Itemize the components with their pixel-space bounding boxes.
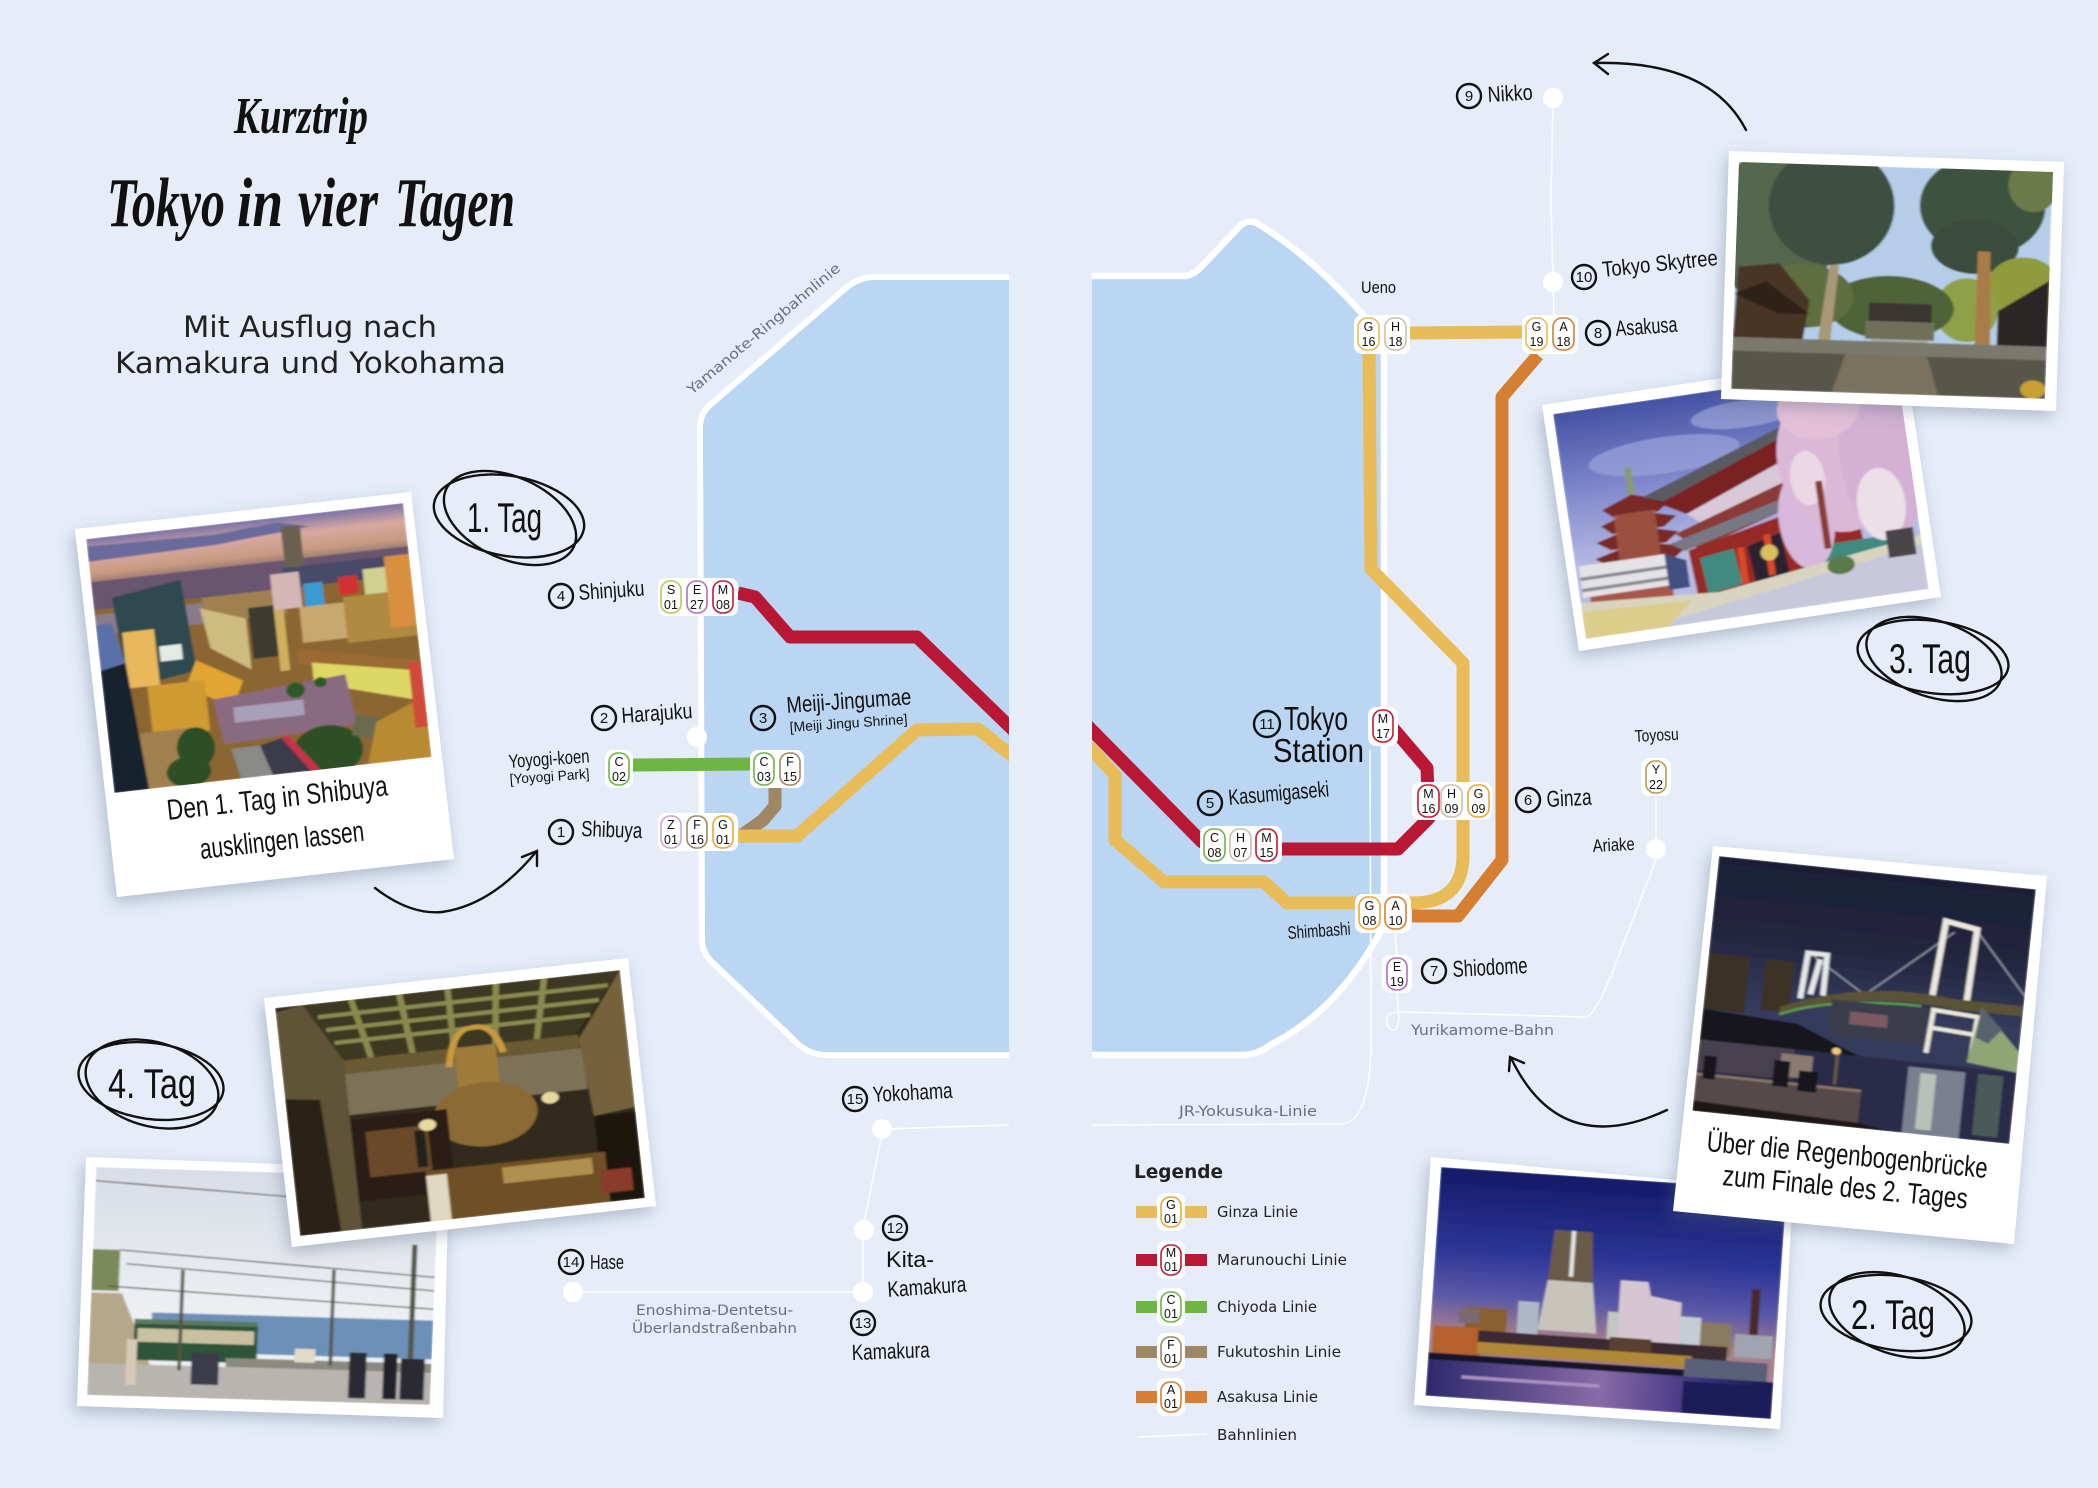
badge: Shimbashi: 10 <box>1389 914 1402 928</box>
badge: Ueno: 18 <box>1389 335 1402 349</box>
station label: Yoyogi-koen: [Yoyogi Park] <box>509 765 590 787</box>
station label: Ginza: Ginza <box>1546 784 1592 812</box>
badge: Meiji-Jingumae: 15 <box>783 770 797 784</box>
station label: Kasumigaseki: Kasumigaseki <box>1227 776 1330 810</box>
legend: Marunouchi: M <box>1166 1246 1176 1260</box>
map: Tokyo left half <box>700 277 1009 1055</box>
badge: Kasumigaseki: C <box>1210 831 1219 845</box>
badge: Yoyogi-koen: C <box>614 755 624 769</box>
day tag: 3. Tag <box>1853 601 2013 717</box>
title: in <box>237 165 283 242</box>
arrow: to Nikko <box>1594 54 1746 130</box>
station label: Kasumigaseki: 5 <box>1206 795 1214 812</box>
badge: Kasumigaseki: M <box>1261 831 1272 845</box>
title: Tokyo <box>107 165 225 242</box>
station label: Shinjuku: Shinjuku <box>578 575 645 605</box>
badge: Shimbashi <box>1355 894 1411 933</box>
legend: Chiyoda: 01 <box>1164 1307 1178 1321</box>
caption: Rainbow Bridge: Über die Regenbogenbrücke <box>1705 1126 1989 1185</box>
legend: Asakusa: 01 <box>1164 1397 1178 1411</box>
line: Asakusa orange <box>1412 355 1538 916</box>
day tag: 2. Tag <box>1816 1256 1976 1374</box>
station label: Shiodome <box>1422 952 1528 983</box>
station label: Shibuya: 1 <box>557 824 565 841</box>
badge: Meiji-Jingumae: C <box>759 755 769 769</box>
station label: Hase: 14 <box>563 1254 579 1271</box>
line label: JR-Yokosuka: JR-Yokusuka-Linie <box>1178 1104 1317 1120</box>
badge: Ueno: 16 <box>1362 335 1375 349</box>
badge: Asakusa <box>1522 315 1578 354</box>
photo: Enoden polaroid <box>77 1157 449 1418</box>
photo: Shibuya polaroid <box>75 492 454 897</box>
day tag: 2. Tag: 2. Tag <box>1851 1291 1935 1338</box>
station label: Tokyo Skytree <box>1572 245 1719 289</box>
station label: Shimbashi: Shimbashi <box>1287 919 1351 943</box>
line label: Yurikamome: Yurikamome-Bahn <box>1410 1023 1554 1039</box>
legend: Chiyoda: C <box>1166 1293 1176 1307</box>
badge: Asakusa: A <box>1559 320 1568 334</box>
line label: Enoshima <box>632 1303 797 1337</box>
day tag: 4. Tag: 4. Tag <box>108 1060 196 1107</box>
subtitle <box>115 310 506 380</box>
line: Chiyoda green <box>633 764 750 765</box>
station label: Hase <box>559 1250 624 1274</box>
badge: Shiodome: E <box>1393 960 1401 974</box>
station label: Nikko: 9 <box>1465 88 1473 105</box>
badge: Kasumigaseki: 08 <box>1208 846 1221 860</box>
station label: Yokohama: 15 <box>847 1091 863 1108</box>
badge: Meiji-Jingumae <box>750 750 804 788</box>
legend: Asakusa: Asakusa Linie <box>1217 1388 1318 1406</box>
station label: Ginza <box>1516 784 1592 812</box>
badge: Shibuya <box>658 813 738 851</box>
line: Ginza gold west <box>738 729 1030 836</box>
badge: Ginza: 09 <box>1445 802 1458 816</box>
station label: Asakusa: 8 <box>1594 325 1602 342</box>
badge: Tokyo Station: M <box>1378 712 1388 726</box>
legend: Fukutoshin <box>1136 1333 1341 1371</box>
badge: Shimbashi: A <box>1391 899 1400 913</box>
badge: Yoyogi-koen <box>605 750 633 788</box>
badge: Shimbashi: G <box>1365 899 1374 913</box>
station label: Harajuku: 2 <box>600 710 608 727</box>
badge: Ginza: H <box>1447 787 1456 801</box>
badge: Shiodome <box>1382 955 1412 993</box>
station label: Meiji-Jingumae: [Meiji Jingu Shrine] <box>789 711 908 735</box>
arrow: to Yokohama <box>1509 1057 1667 1126</box>
line: Marunouchi red east <box>1070 708 1429 849</box>
line: Marunouchi red west <box>738 586 1009 735</box>
line label: Enoshima: Überlandstraßenbahn <box>632 1319 797 1337</box>
title <box>107 88 515 242</box>
legend: Asakusa: A <box>1167 1383 1176 1397</box>
legend heading: Legende <box>1134 1161 1223 1183</box>
station label: Yokohama <box>843 1078 954 1111</box>
badge: Shibuya: 16 <box>690 833 704 847</box>
map: Tokyo right half <box>1092 221 1384 1055</box>
badge: Ginza <box>1412 782 1492 820</box>
badge: Shiodome: 19 <box>1390 975 1404 989</box>
station label: Yoyogi-koen: Yoyogi-koen <box>508 746 590 773</box>
badge: Shibuya: 01 <box>664 833 678 847</box>
badge: Meiji-Jingumae: 03 <box>757 770 771 784</box>
station label: Shiodome: 7 <box>1430 963 1438 980</box>
badge: Shinjuku: E <box>693 583 701 597</box>
badge: Meiji-Jingumae: F <box>786 755 794 769</box>
legend: Chiyoda: Chiyoda Linie <box>1217 1298 1317 1316</box>
badge: Shinjuku <box>658 578 738 616</box>
legend: Marunouchi: Marunouchi Linie <box>1217 1251 1347 1269</box>
station label: Kamakura <box>851 1311 931 1365</box>
legend: Ginza: G <box>1166 1198 1176 1212</box>
station label: Nikko <box>1457 80 1533 108</box>
station label: Kamakura: 13 <box>855 1315 871 1332</box>
badge: Toyosu <box>1641 758 1671 796</box>
title: Tagen <box>395 165 515 242</box>
legend: Fukutoshin: F <box>1167 1338 1175 1352</box>
station label: Harajuku: Harajuku <box>621 698 693 728</box>
badge: Shibuya: F <box>693 818 701 832</box>
station label: Harajuku <box>592 698 693 730</box>
station label: Shinjuku <box>549 575 645 608</box>
line: Fukutoshin brown <box>738 788 775 838</box>
badge: Ueno <box>1354 315 1410 354</box>
day tag: 1. Tag <box>427 452 591 584</box>
station label: Tokyo Skytree: Tokyo Skytree <box>1601 245 1719 282</box>
legend: Marunouchi: 01 <box>1164 1260 1178 1274</box>
title: Kurztrip <box>233 88 368 145</box>
badge: Toyosu: 22 <box>1649 778 1663 792</box>
legend: Asakusa <box>1136 1378 1318 1416</box>
badge: Shinjuku: S <box>667 583 675 597</box>
station label: Tokyo Station <box>1254 700 1364 769</box>
station label: Meiji-Jingumae <box>751 683 912 735</box>
station label: Meiji-Jingumae: Meiji-Jingumae <box>786 683 912 718</box>
badge: Kasumigaseki: 15 <box>1260 846 1273 860</box>
station label: Asakusa <box>1586 312 1679 345</box>
legend <box>1134 1161 1347 1444</box>
station label: Shibuya <box>549 816 643 844</box>
title: vier <box>298 165 379 242</box>
badge: Kasumigaseki: H <box>1236 831 1245 845</box>
line: Ginza gold east <box>1070 332 1525 903</box>
day tag: 3. Tag: 3. Tag <box>1889 635 1971 682</box>
legend: Ginza: Ginza Linie <box>1217 1203 1298 1221</box>
badge: Shinjuku: 27 <box>690 598 704 612</box>
badge: Ginza: 16 <box>1422 802 1435 816</box>
day tag: 4. Tag <box>73 1025 229 1143</box>
badge: Ginza: M <box>1423 787 1434 801</box>
photo: Asakusa polaroid <box>1542 351 1942 651</box>
station label: Shiodome: Shiodome <box>1452 952 1528 982</box>
badge: Shibuya: G <box>718 818 728 832</box>
photo: Kamakura temple polaroid <box>264 958 656 1247</box>
badge: Shibuya: Z <box>667 818 675 832</box>
legend: rail lines <box>1138 1426 1297 1444</box>
station label: Tokyo Skytree: 10 <box>1576 269 1592 286</box>
photo: Rainbow Bridge polaroid <box>1673 846 2047 1244</box>
badge: Asakusa: G <box>1532 320 1541 334</box>
line label: Enoshima: Enoshima-Dentetsu- <box>636 1303 793 1319</box>
legend: Ginza: 01 <box>1164 1212 1178 1226</box>
day tag: 1. Tag: 1. Tag <box>467 494 542 541</box>
arrow: to Shibuya <box>375 851 537 912</box>
station label: Asakusa: Asakusa <box>1615 312 1679 341</box>
caption: Shibuya: Den 1. Tag in Shibuya <box>165 770 390 827</box>
station label: Tokyo Station: 11 <box>1259 716 1275 733</box>
station label: Yokohama: Yokohama <box>872 1078 954 1107</box>
badge: Asakusa: 19 <box>1530 335 1543 349</box>
caption: Shibuya: ausklingen lassen <box>198 816 366 866</box>
station label: Shibuya: Shibuya <box>581 816 643 843</box>
station label: Kita-Kamakura: 12 <box>887 1220 903 1237</box>
station label: Shinjuku: 4 <box>557 588 565 605</box>
station label: Yoyogi-koen <box>508 746 590 787</box>
badge: Shinjuku: 01 <box>664 598 678 612</box>
station dots <box>563 88 1666 1302</box>
station label: Kita-Kamakura: Kita- <box>886 1247 934 1272</box>
station label: Ginza: 6 <box>1524 792 1532 809</box>
badge: Ginza: G <box>1474 787 1483 801</box>
photo: Yokohama polaroid <box>1414 1157 1793 1429</box>
legend: Fukutoshin: Fukutoshin Linie <box>1217 1343 1341 1361</box>
legend: Marunouchi <box>1136 1241 1347 1279</box>
station label: Tokyo Station: Tokyo <box>1284 700 1348 737</box>
badge: Asakusa: 18 <box>1557 335 1570 349</box>
station label: Hase: Hase <box>590 1252 624 1274</box>
station label: Tokyo Station: Station <box>1273 732 1364 769</box>
badge: Kasumigaseki <box>1200 826 1282 864</box>
badge: Tokyo Station <box>1368 707 1398 746</box>
badge: Toyosu: Y <box>1652 763 1661 777</box>
badge: Shinjuku: 08 <box>716 598 730 612</box>
badge: Kasumigaseki: 07 <box>1234 846 1247 860</box>
caption: Shibuya <box>165 770 390 866</box>
station label: Toyosu: Toyosu <box>1634 725 1679 746</box>
badge: Shimbashi: 08 <box>1363 914 1376 928</box>
station label: Ueno: Ueno <box>1361 278 1396 297</box>
badge: Ueno: G <box>1364 320 1373 334</box>
label: Yamanote line: Yamanote-Ringbahnlinie <box>683 260 844 399</box>
legend: Ginza <box>1136 1193 1298 1231</box>
station label: Kita-Kamakura <box>883 1216 968 1302</box>
legend: rail lines: Bahnlinien <box>1217 1426 1297 1444</box>
subtitle: Mit Ausflug nach <box>183 310 437 344</box>
legend: Chiyoda <box>1136 1288 1317 1326</box>
caption: Rainbow Bridge <box>1705 1126 1989 1216</box>
station label: Kasumigaseki <box>1198 776 1330 815</box>
badge: Shibuya: 01 <box>716 833 730 847</box>
station label: Nikko: Nikko <box>1487 80 1533 107</box>
badge: Ueno: H <box>1391 320 1400 334</box>
badge: Tokyo Station: 17 <box>1376 727 1390 741</box>
station label: Meiji-Jingumae: 3 <box>759 710 767 727</box>
badge: Shinjuku: M <box>718 583 728 597</box>
badge: Yoyogi-koen: 02 <box>612 770 626 784</box>
station label: Kamakura: Kamakura <box>851 1337 931 1365</box>
photo: Nikko polaroid <box>1706 143 2066 411</box>
station label: Kita-Kamakura: Kamakura <box>887 1271 968 1302</box>
station label: Ariake: Ariake <box>1592 834 1635 856</box>
caption: Rainbow Bridge: zum Finale des 2. Tages <box>1721 1160 1969 1216</box>
badge: Ginza: 09 <box>1472 802 1485 816</box>
rail lines: thin regional lines <box>573 98 1656 1292</box>
subtitle: Kamakura und Yokohama <box>115 346 506 380</box>
legend: Fukutoshin: 01 <box>1164 1352 1178 1366</box>
